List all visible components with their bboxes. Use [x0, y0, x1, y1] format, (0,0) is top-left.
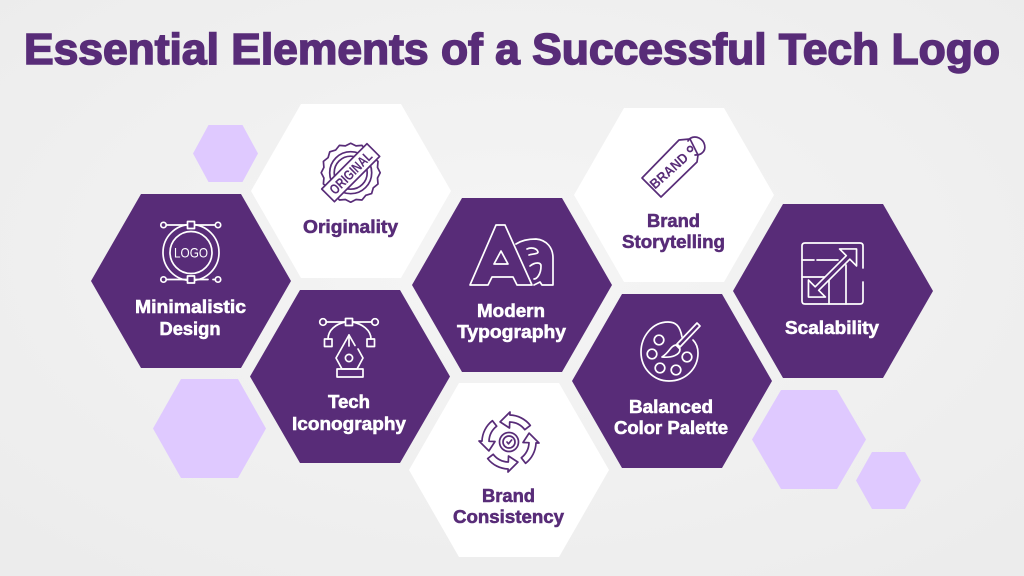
panel: Brand Storytelling [574, 108, 774, 282]
label: Brand [647, 211, 700, 231]
icon: logo with bezier handles [161, 222, 221, 283]
hexagon background [572, 294, 772, 468]
icon: brand tag [642, 137, 705, 197]
icon: Aa letterforms [470, 225, 553, 285]
label: Consistency [453, 507, 564, 527]
hexagon background [251, 104, 451, 278]
label: Minimalistic [135, 297, 246, 317]
panel: Minimalistic Design [91, 194, 291, 368]
decorative hexagon: small top left [193, 125, 258, 182]
label: Tech [328, 392, 370, 412]
hexagon background [733, 204, 933, 378]
icon: circular arrows with check badge [479, 412, 539, 472]
label: Iconography [292, 414, 406, 434]
hexagon background [91, 194, 291, 368]
title: Essential Elements of a Successful Tech Logo [24, 25, 1000, 74]
panel: Modern Typography [412, 198, 612, 372]
panel: Brand Consistency [409, 383, 609, 557]
label: Originality [303, 217, 398, 237]
decorative hexagon: large bottom right [752, 390, 866, 489]
panel: Balanced Color Palette [572, 294, 772, 468]
label: Scalability [785, 318, 879, 338]
label: Modern [477, 301, 545, 321]
decorative hexagon: large bottom left [153, 379, 266, 478]
panel: Originality [251, 104, 451, 278]
icon: logo with bezier handles: LOGO [174, 244, 208, 260]
icon: scaling chart with double arrow [800, 240, 865, 306]
hexagon background [409, 383, 609, 557]
hexagon background [574, 108, 774, 282]
hexagon background [250, 290, 450, 463]
decorative hexagon: small bottom right [856, 452, 921, 509]
label: Storytelling [622, 232, 725, 252]
label: Brand [482, 486, 535, 506]
icon: pen tool [320, 318, 378, 377]
label: Color Palette [614, 418, 728, 438]
icon: paint palette and brush [641, 322, 700, 381]
icon: original seal stamp: ORIGINAL [326, 148, 376, 197]
label: Balanced [629, 397, 713, 417]
icon: brand tag: BRAND [646, 149, 691, 192]
hexagon background [412, 198, 612, 372]
label: Typography [457, 322, 566, 342]
panel: Scalability [733, 204, 933, 378]
label: Design [160, 319, 220, 339]
panel: Tech Iconography [250, 290, 450, 463]
